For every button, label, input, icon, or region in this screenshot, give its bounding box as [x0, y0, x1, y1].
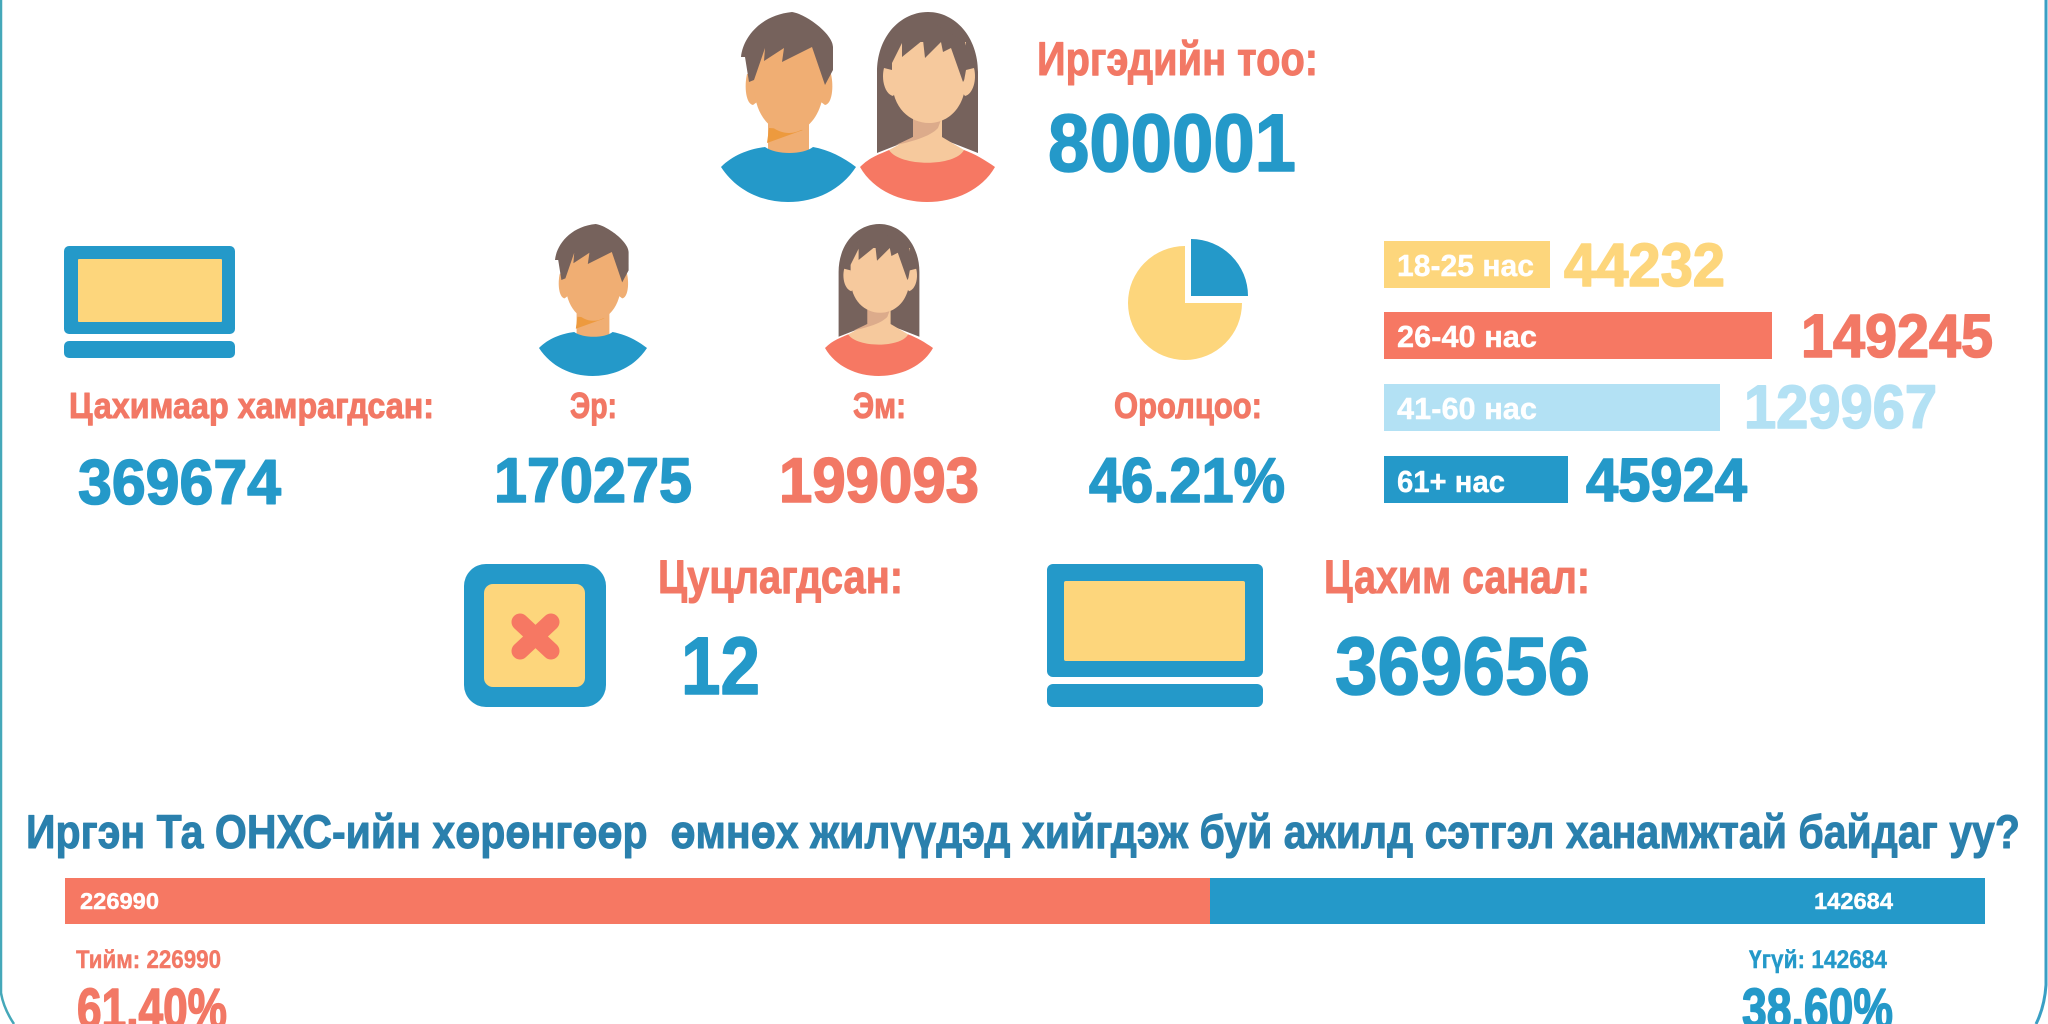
bar: age 41-60	[1384, 373, 1937, 441]
heading: population: Иргэдийн тоо:	[1037, 32, 1318, 85]
bar: age 41-60: 41-60 нас	[1397, 391, 1537, 426]
bar: age 26-40: 26-40 нас	[1397, 319, 1537, 354]
chart: age group bars	[1384, 231, 1993, 514]
icon: woman small	[825, 224, 933, 376]
icon: spoiled ballot	[464, 564, 606, 707]
number: male: 170275	[494, 446, 692, 516]
bar: age 18-25	[1384, 231, 1725, 299]
label: female: Эм:	[853, 385, 906, 426]
bar: age 61+: 61+ нас	[1397, 464, 1505, 499]
icon: man large	[721, 12, 856, 202]
label: no count: Үгүй: 142684	[1749, 946, 1887, 974]
label: electronic coverage: Цахимаар хамрагдсан:	[69, 385, 434, 426]
label: yes count: Тийм: 226990	[76, 946, 221, 974]
bar: age 18-25: 18-25 нас	[1397, 248, 1534, 283]
number: electronic vote: 369656	[1335, 621, 1590, 712]
label: male: Эр:	[570, 385, 617, 426]
number: electronic coverage: 369674	[78, 448, 281, 518]
chart: yes/no stacked bar: 142684	[1814, 888, 1893, 914]
bar: age 26-40: 149245	[1801, 302, 1993, 370]
number: female: 199093	[779, 446, 979, 516]
icon: man and woman pair	[721, 12, 995, 202]
bar: age 18-25: 44232	[1564, 231, 1725, 299]
chart: participation pie	[1128, 239, 1248, 360]
icon: woman large	[860, 12, 995, 202]
bar: age 41-60: 129967	[1744, 373, 1937, 441]
label: participation: Оролцоо:	[1114, 385, 1262, 426]
icon: laptop small	[64, 246, 235, 358]
number: spoiled: 12	[681, 621, 760, 712]
label: electronic vote: Цахим санал:	[1324, 550, 1590, 603]
chart: yes/no stacked bar: 226990	[80, 888, 159, 914]
icon: man small	[539, 224, 647, 376]
bar: age 26-40	[1384, 302, 1993, 370]
number: population: 800001	[1048, 98, 1296, 189]
label: spoiled: Цуцлагдсан:	[658, 550, 903, 603]
chart: yes/no stacked bar	[65, 878, 1985, 924]
bar: age 61+	[1384, 446, 1747, 514]
icon: laptop large	[1047, 564, 1263, 707]
bar: age 61+: 45924	[1586, 446, 1747, 514]
number: participation: 46.21%	[1089, 446, 1285, 516]
